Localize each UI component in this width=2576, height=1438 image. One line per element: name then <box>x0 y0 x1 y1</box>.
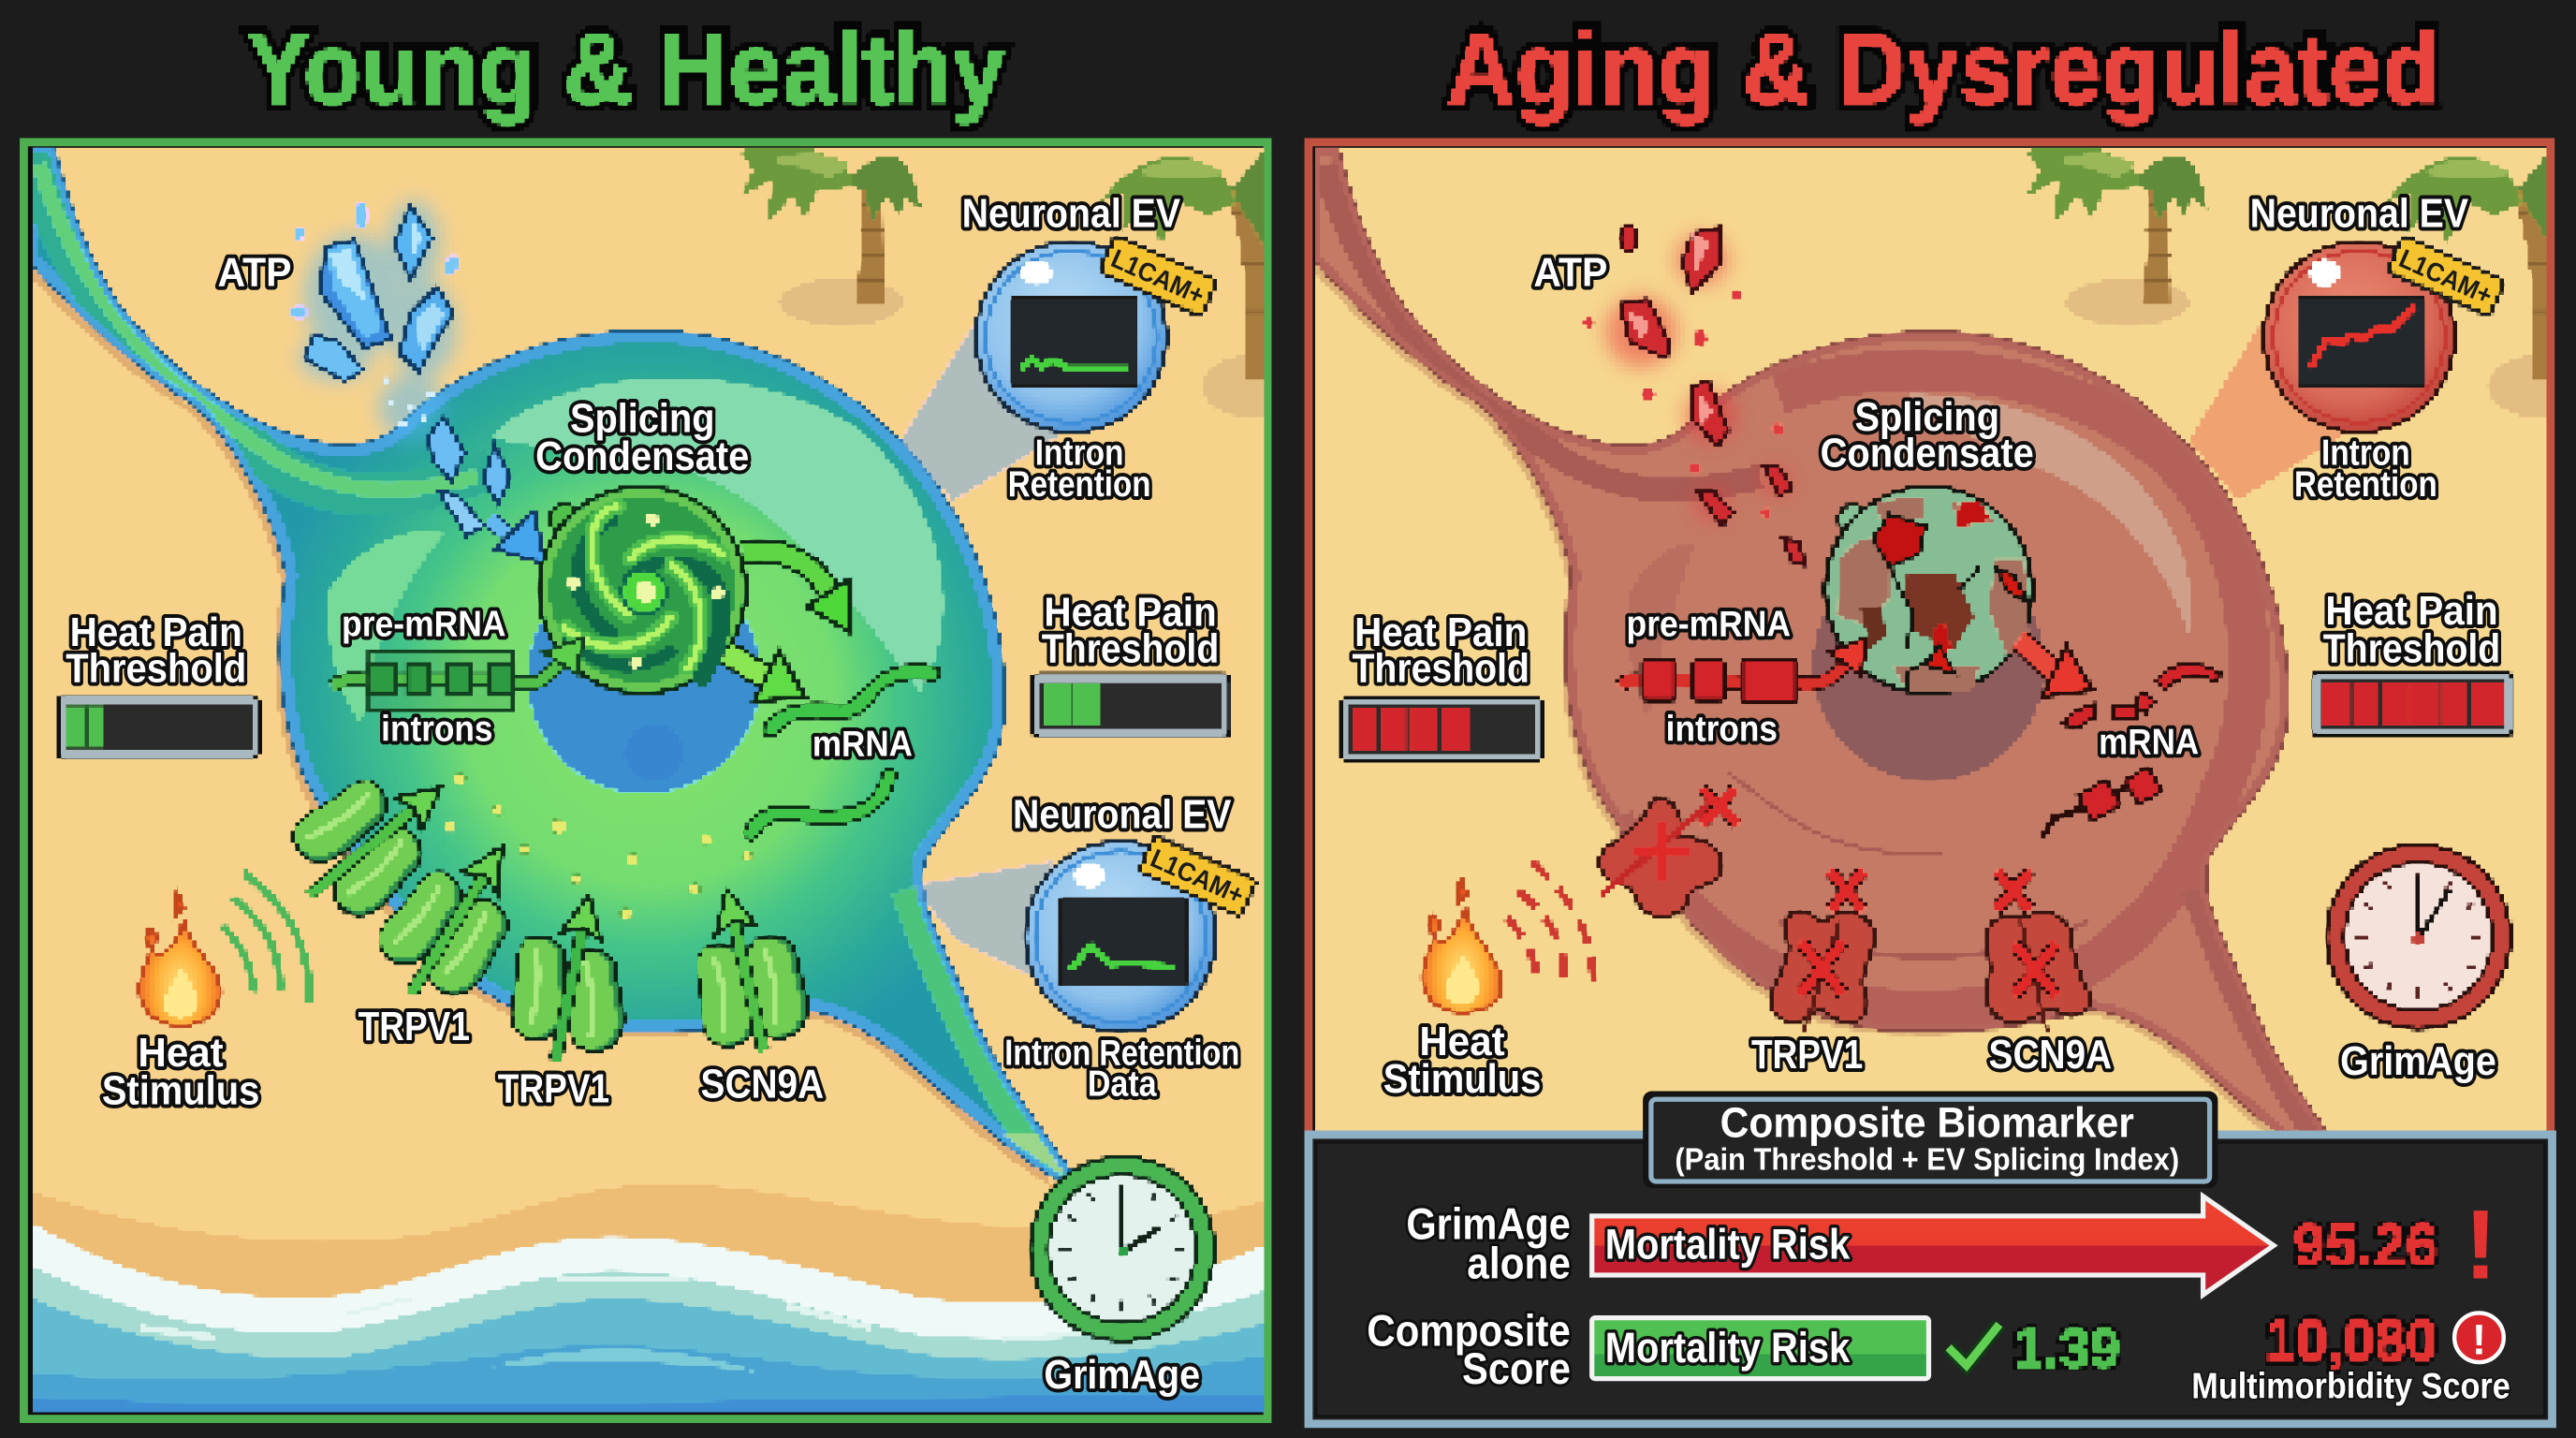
icon: check mark <box>1949 1325 1999 1366</box>
premature mRNA chain <box>1620 638 1866 703</box>
labels: young panel: Heat <box>138 1030 224 1076</box>
labels: young panel: introns <box>381 710 493 750</box>
labels: aging panel: Heat <box>1419 1019 1505 1064</box>
row label: composite score <box>1367 1306 1571 1394</box>
degraded neuron cell body <box>1308 153 2352 1188</box>
labels: aging panel: Stimulus <box>1383 1056 1541 1102</box>
labels: young panel: Data <box>1088 1064 1157 1105</box>
heat pain threshold meter left <box>1341 697 1542 760</box>
composite biomarker heading: (Pain Threshold + EV Splicing Index) <box>1675 1143 2179 1178</box>
icon: alert circle: ! <box>2472 1315 2486 1363</box>
mortality risk arrow high <box>1592 1196 2274 1295</box>
labels: aging panel: pre-mRNA <box>1627 604 1791 644</box>
row label: composite score: Score <box>1462 1344 1571 1394</box>
mortality risk bar low: Mortality Risk <box>1605 1324 1851 1372</box>
labels: young panel: Neuronal EV <box>1013 792 1231 838</box>
labels: aging panel: L1CAM+ <box>2395 243 2496 310</box>
labels: aging panel: Neuronal EV <box>2250 190 2468 236</box>
broken TRPV1 channel 2 <box>1771 871 1874 1032</box>
nucleus <box>529 620 758 793</box>
labels: young panel <box>66 190 1248 1398</box>
value 95.26: 95.26 <box>2293 1212 2438 1278</box>
broken SCN9A channel <box>1986 871 2090 1032</box>
ATP energy arrow <box>490 511 546 564</box>
neuronal EV bubble lower <box>1025 842 1216 1032</box>
labels: young panel: Neuronal EV <box>962 190 1180 236</box>
labels: young panel: Intron <box>1035 433 1123 474</box>
labels: aging panel: Intron <box>2321 433 2410 474</box>
heat waves <box>222 873 309 1003</box>
labels: aging panel: GrimAge <box>2340 1038 2496 1084</box>
nucleus dark <box>1812 549 2045 782</box>
labels: aging panel: ATP <box>1533 249 1607 295</box>
labels: aging panel: TRPV1 <box>1751 1032 1863 1078</box>
labels: aging panel: Heat Pain <box>2325 588 2498 634</box>
multimorbidity score label: Multimorbidity Score <box>2191 1367 2510 1407</box>
neuronal EV bubble top <box>976 242 1166 433</box>
TRPV1 channel 2 <box>378 844 510 998</box>
icon: flame <box>1423 877 1502 1012</box>
labels: young panel: Threshold <box>1042 625 1219 671</box>
labels: young panel: TRPV1 <box>359 1004 470 1049</box>
alert mark: ! <box>2465 1191 2497 1300</box>
icon: flame <box>139 892 221 1025</box>
labels: young panel: Threshold <box>66 645 246 691</box>
row label: GrimAge alone: alone <box>1467 1240 1571 1289</box>
labels: aging panel: Condensate <box>1821 431 2034 477</box>
neuronal EV bubble red <box>2264 242 2454 433</box>
labels: young panel: Splicing <box>570 396 714 442</box>
labels: aging panel: Threshold <box>1352 645 1530 691</box>
cracked splicing condensate <box>1825 487 2032 694</box>
labels: young panel: TRPV1 <box>498 1066 609 1112</box>
neuron cell body with axon and tail <box>22 153 1068 1190</box>
ATP shards <box>1583 226 1806 565</box>
value 10,080: 10,080 <box>2264 1308 2437 1373</box>
labels: aging panel: Splicing <box>1855 394 1999 440</box>
L1CAM tag lower <box>1138 835 1257 917</box>
labels: young panel: L1CAM+ <box>1147 844 1248 910</box>
mortality risk bar low <box>1592 1318 1928 1379</box>
labels: young panel: Condensate <box>535 433 749 479</box>
TRPV1 channel 3 <box>509 901 624 1062</box>
neuronal EV beam <box>2188 279 2352 501</box>
labels: young panel: Intron Retention <box>1004 1033 1239 1073</box>
labels: aging panel: Threshold <box>2323 625 2500 671</box>
value 1.39: 1.39 <box>2013 1316 2120 1379</box>
icon: GrimAge clock aged <box>2326 844 2510 1029</box>
palm trees <box>739 148 1264 418</box>
panel: young and healthy neuron <box>22 142 1312 1419</box>
L1CAM tag top <box>1099 235 1217 316</box>
panel: aging and dysregulated neuron <box>1308 142 2576 1419</box>
heat pain threshold meter right <box>2312 673 2512 735</box>
labels: aging panel <box>1352 190 2500 1102</box>
green exit arrows <box>726 551 851 701</box>
panel: composite biomarker <box>1309 1095 2553 1424</box>
icon: GrimAge clock healthy <box>1030 1157 1214 1341</box>
palm trees <box>2026 144 2576 419</box>
L1CAM tag <box>2387 235 2505 316</box>
heat pain threshold meter left <box>58 696 258 758</box>
SCN9A channel <box>695 894 811 1051</box>
mRNA fragments <box>2042 664 2221 838</box>
splicing condensate swirl <box>539 487 746 694</box>
neuronal EV beam lower <box>912 861 1051 986</box>
nucleus shading <box>624 723 683 782</box>
labels: young panel: Retention <box>1008 464 1150 505</box>
labels: aging panel: mRNA <box>2099 723 2199 763</box>
broken exit arrow <box>2019 639 2093 697</box>
ATP crystals <box>291 200 511 536</box>
mortality risk arrow high: Mortality Risk <box>1605 1220 1851 1268</box>
composite biomarker heading: Composite Biomarker <box>1720 1099 2134 1147</box>
labels: young panel: L1CAM+ <box>1107 243 1208 310</box>
labels: aging panel: introns <box>1666 710 1778 750</box>
labels: aging panel: SCN9A <box>1989 1032 2112 1078</box>
TRPV1 channel 1 <box>285 773 437 927</box>
icon: alert circle <box>2454 1313 2504 1363</box>
composite biomarker heading <box>1647 1095 2214 1184</box>
mRNA strands <box>751 671 933 833</box>
title: Young & Healthy: Young & Healthy <box>246 12 1005 126</box>
row label: GrimAge alone <box>1406 1199 1571 1289</box>
labels: young panel: Stimulus <box>102 1067 259 1113</box>
fragmented heat waves <box>1506 861 1594 994</box>
labels: young panel: pre-mRNA <box>342 604 506 644</box>
row label: composite score: Composite <box>1367 1306 1571 1356</box>
labels: young panel: SCN9A <box>701 1061 824 1107</box>
beach shoreline and sea <box>33 1183 1265 1413</box>
labels: aging panel: Retention <box>2294 464 2437 505</box>
labels: young panel: GrimAge <box>1044 1352 1200 1398</box>
labels: young panel: Heat Pain <box>70 609 242 655</box>
title: Aging & Dysregulated: Aging & Dysregulated <box>1446 12 2440 126</box>
heat pain threshold meter right <box>1032 675 1230 737</box>
labels: aging panel: Heat Pain <box>1354 609 1527 655</box>
row label: GrimAge alone: GrimAge <box>1406 1199 1571 1249</box>
pre-mRNA with introns <box>332 638 583 710</box>
labels: young panel: ATP <box>218 249 292 295</box>
neuronal EV beam top <box>899 326 1058 502</box>
vesicle dots <box>446 773 753 919</box>
labels: young panel: mRNA <box>812 724 913 764</box>
labels: young panel: Heat Pain <box>1044 590 1217 636</box>
broken TRPV1 channel 1 <box>1600 789 1738 917</box>
